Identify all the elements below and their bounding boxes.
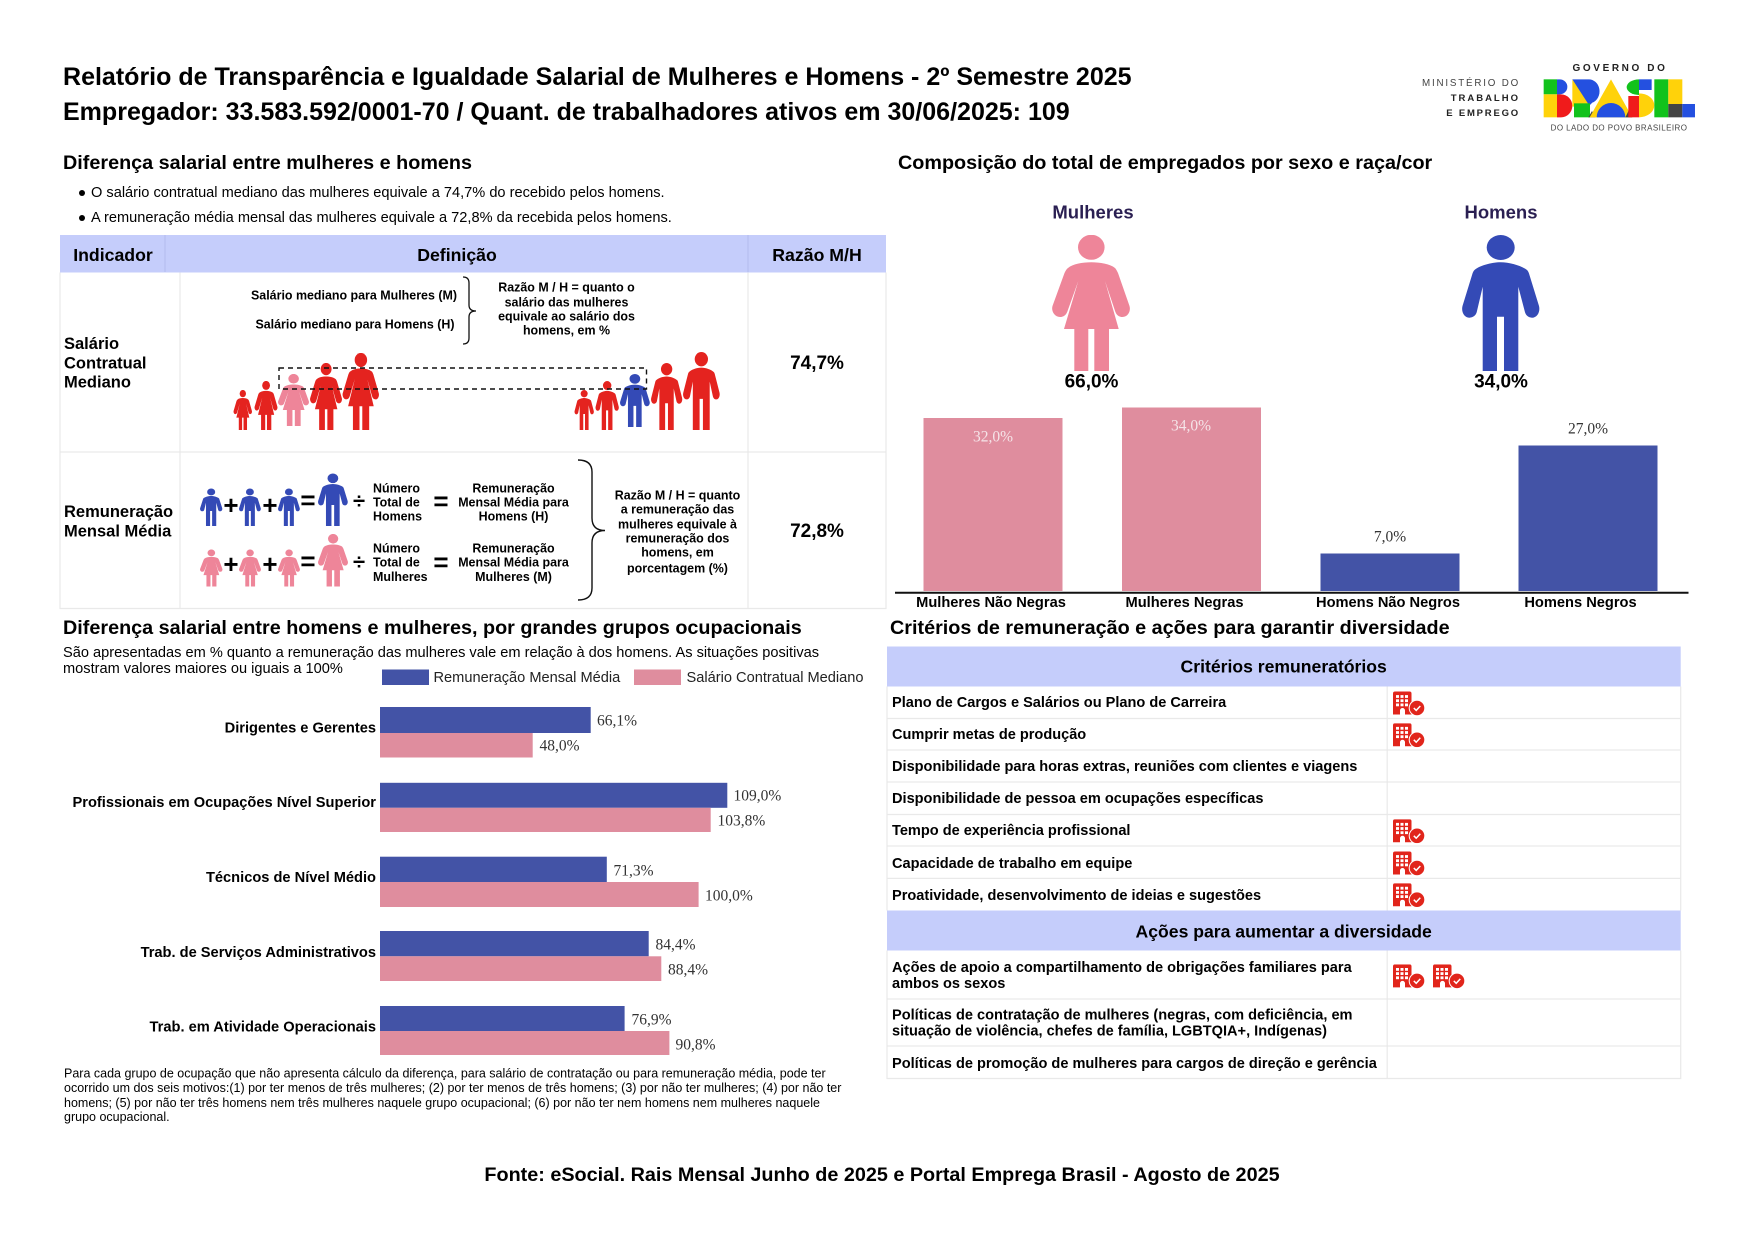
group: atividade operacionais: 76,9% bbox=[632, 1012, 672, 1028]
definition: fórmula mulheres: = bbox=[300, 546, 316, 576]
heading: critérios: Critérios de remuneração e ações para garantir diversidade bbox=[890, 617, 1450, 639]
definition: fórmula mulheres: ÷ bbox=[353, 550, 365, 574]
definition: fórmula mulheres: Mulheres (M) bbox=[475, 570, 552, 584]
indicator: remuneração mensal média: Mensal Média bbox=[64, 522, 172, 540]
definition: fórmula mulheres: Total de bbox=[373, 556, 420, 570]
criteria list: Proatividade, desenvolvimento de ideias e sugestões bbox=[892, 888, 1261, 904]
definition: fórmula mulheres: + bbox=[223, 549, 239, 579]
text block: resumo: A remuneração média mensal das mulheres equivale a 72,8% da recebida pelos homens. bbox=[91, 210, 672, 226]
indicator: salário contratual mediano: Contratual bbox=[64, 354, 146, 372]
footnote: homens; (5) por não ter três homens nem três mulheres naquele grupo ocupacional; (6) por não ter nem homens nem mulheres naquele bbox=[64, 1096, 820, 1110]
definition: fórmula homens: = bbox=[433, 486, 449, 516]
bar chart: composição por raça/cor: 27,0% bbox=[1568, 420, 1608, 438]
icons: critérios adotados bbox=[1393, 692, 1425, 908]
panel: tabela de indicadores bbox=[60, 235, 886, 608]
group: atividade operacionais bbox=[150, 1006, 716, 1055]
definition: salário mediano: Salário mediano para Mulheres (M) bbox=[251, 288, 457, 302]
panel: critérios e ações bbox=[887, 646, 1681, 1078]
criteria list: Disponibilidade de pessoa em ocupações específicas bbox=[892, 791, 1263, 807]
logo: ministério e governo: MINISTÉRIO DO bbox=[1422, 78, 1520, 89]
definition: salário mediano: Salário mediano para Homens (H) bbox=[255, 318, 455, 332]
group: profissionais nível superior bbox=[72, 783, 781, 832]
definition: fórmula homens: = bbox=[300, 485, 316, 515]
group: profissionais nível superior: 103,8% bbox=[718, 812, 765, 830]
logo: ministério e governo: E EMPREGO bbox=[1446, 108, 1520, 119]
definition: fórmula mulheres: Mulheres bbox=[373, 570, 428, 584]
group: profissionais nível superior: Profissionais em Ocupações Nível Superior bbox=[72, 795, 376, 811]
indicator: remuneração mensal média: Remuneração bbox=[64, 503, 173, 521]
actions list: Políticas de contratação de mulheres (negras, com deficiência, em bbox=[892, 1008, 1353, 1024]
panel: mulheres: Mulheres bbox=[1052, 202, 1134, 222]
group: dirigentes e gerentes: 66,1% bbox=[597, 712, 637, 730]
footnote: grupo ocupacional. bbox=[64, 1110, 170, 1124]
legend bbox=[382, 670, 864, 686]
group: serviços administrativos bbox=[141, 931, 708, 981]
panel: mulheres: 66,0% bbox=[1065, 372, 1119, 392]
heading: diferença por grupos ocupacionais: Diferença salarial entre homens e mulheres, por grandes grupos ocupacionais bbox=[63, 617, 802, 639]
pictogram: mulheres e homens ordenados bbox=[234, 352, 720, 430]
actions list: ambos os sexos bbox=[892, 976, 1005, 992]
logo: ministério e governo: GOVERNO DO bbox=[1573, 63, 1667, 74]
panel: homens: 34,0% bbox=[1474, 372, 1528, 392]
text block: resumo: O salário contratual mediano das mulheres equivale a 74,7% do recebido pelos homens. bbox=[91, 185, 665, 201]
group: serviços administrativos: Trab. de Serviços Administrativos bbox=[141, 945, 376, 961]
logo: ministério e governo: TRABALHO bbox=[1451, 93, 1520, 104]
definition: fórmula mulheres: + bbox=[262, 549, 278, 579]
definition: fórmula homens: Mensal Média para bbox=[458, 496, 569, 510]
indicator: salário contratual mediano bbox=[64, 335, 146, 392]
source: Fonte: eSocial. Rais Mensal Junho de 2025 e Portal Emprega Brasil - Agosto de 2025 bbox=[484, 1164, 1280, 1186]
definition: razão remuneração: a remuneração das bbox=[621, 502, 734, 516]
criteria list: Disponibilidade para horas extras, reuniões com clientes e viagens bbox=[892, 759, 1357, 775]
indicator: remuneração mensal média bbox=[64, 503, 173, 540]
bar chart: composição por raça/cor: 7,0% bbox=[1374, 528, 1406, 546]
table header: Definição bbox=[417, 245, 497, 265]
definition: razão remuneração bbox=[578, 460, 741, 600]
group: serviços administrativos: 84,4% bbox=[656, 936, 696, 954]
definition: fórmula mulheres: Mensal Média para bbox=[458, 556, 569, 570]
criteria list: Tempo de experiência profissional bbox=[892, 823, 1130, 839]
criteria list: Cumprir metas de produção bbox=[892, 727, 1086, 743]
bar chart: composição por raça/cor: Homens Não Negros bbox=[1316, 595, 1460, 611]
header: critérios remuneratórios: Critérios remuneratórios bbox=[1181, 656, 1387, 676]
definition: salário mediano: homens, em % bbox=[523, 324, 610, 338]
group: técnicos de nível médio: 100,0% bbox=[705, 888, 753, 904]
definition: fórmula mulheres: = bbox=[433, 547, 449, 577]
panel: homens: Homens bbox=[1464, 202, 1538, 222]
bar chart: grupos ocupacionais bbox=[72, 707, 781, 1055]
bar chart: composição por raça/cor: Mulheres Não Negras bbox=[916, 595, 1066, 611]
criteria list bbox=[892, 695, 1357, 904]
actions list: Ações de apoio a compartilhamento de obrigações familiares para bbox=[892, 960, 1353, 976]
icons: ações adotadas bbox=[1393, 964, 1465, 989]
legend: Remuneração Mensal Média bbox=[434, 670, 621, 686]
definition: fórmula homens: Homens bbox=[373, 510, 422, 524]
definition: razão remuneração: homens, em bbox=[641, 546, 714, 560]
value: razão remuneração: 72,8% bbox=[790, 521, 844, 542]
footnote bbox=[64, 1066, 841, 1124]
actions list bbox=[892, 960, 1378, 1072]
definition: fórmula homens: ÷ bbox=[353, 488, 365, 514]
bar chart: composição por raça/cor: 34,0% bbox=[1171, 418, 1211, 434]
group: serviços administrativos: 88,4% bbox=[668, 962, 708, 978]
definition: fórmula homens: + bbox=[262, 490, 278, 520]
definition: fórmula mulheres: Remuneração bbox=[472, 542, 555, 556]
text block: resumo bbox=[79, 185, 672, 226]
bar chart: composição por raça/cor: Mulheres Negras bbox=[1126, 595, 1243, 611]
definition: fórmula homens: + bbox=[223, 490, 239, 520]
text block: explicação: São apresentadas em % quanto a remuneração das mulheres vale em relação à dos homens. As situações positivas bbox=[63, 645, 819, 661]
definition: razão remuneração: remuneração dos bbox=[626, 532, 729, 546]
definition: salário mediano: equivale ao salário dos bbox=[498, 310, 635, 324]
title: Relatório de Transparência e Igualdade Salarial de Mulheres e Homens - 2º Semestre 2025 bbox=[63, 63, 1132, 91]
definition: fórmula homens bbox=[200, 474, 569, 526]
definition: salário mediano: salário das mulheres bbox=[505, 296, 628, 310]
definition: fórmula homens: Remuneração bbox=[472, 482, 555, 496]
legend: Salário Contratual Mediano bbox=[686, 670, 864, 686]
text block: explicação bbox=[63, 645, 819, 677]
panel: homens bbox=[1462, 202, 1539, 392]
indicator: salário contratual mediano: Mediano bbox=[64, 374, 131, 392]
panel: mulheres bbox=[1052, 202, 1134, 392]
definition: razão remuneração: mulheres equivale à bbox=[618, 518, 737, 532]
group: técnicos de nível médio bbox=[206, 857, 753, 907]
logo: ministério e governo bbox=[1422, 63, 1695, 132]
group: dirigentes e gerentes bbox=[225, 707, 637, 758]
footnote: ocorrido um dos seis motivos:(1) por ter menos de três mulheres; (2) por ter menos de três homens; (3) por não ter mulheres; (4) por não ter bbox=[64, 1081, 841, 1095]
definition: razão remuneração: porcentagem (%) bbox=[627, 562, 728, 576]
definition: fórmula homens: Número bbox=[373, 482, 420, 496]
bar chart: composição por raça/cor: Homens Negros bbox=[1524, 595, 1637, 611]
group: dirigentes e gerentes: 48,0% bbox=[540, 738, 580, 754]
definition: fórmula mulheres bbox=[200, 534, 569, 586]
table header bbox=[73, 245, 862, 265]
group: técnicos de nível médio: 71,3% bbox=[614, 862, 654, 880]
definition: salário mediano bbox=[251, 277, 635, 344]
title bbox=[63, 63, 1132, 126]
actions list: Políticas de promoção de mulheres para cargos de direção e gerência bbox=[892, 1056, 1378, 1072]
logo: ministério e governo: DO LADO DO POVO BRASILEIRO bbox=[1551, 124, 1687, 132]
criteria list: Plano de Cargos e Salários ou Plano de Carreira bbox=[892, 695, 1227, 711]
definition: fórmula homens: Homens (H) bbox=[479, 510, 548, 524]
group: dirigentes e gerentes: Dirigentes e Gerentes bbox=[225, 720, 376, 736]
group: profissionais nível superior: 109,0% bbox=[734, 788, 781, 804]
heading: composição: Composição do total de empregados por sexo e raça/cor bbox=[898, 152, 1433, 174]
footnote: Para cada grupo de ocupação que não apresenta cálculo da diferença, para salário de contratação ou para remuneração média, pode ter bbox=[64, 1066, 826, 1080]
definition: fórmula mulheres: Número bbox=[373, 542, 420, 556]
group: atividade operacionais: Trab. em Atividade Operacionais bbox=[150, 1020, 376, 1036]
criteria list: Capacidade de trabalho em equipe bbox=[892, 856, 1132, 872]
table header: Indicador bbox=[73, 245, 153, 265]
group: atividade operacionais: 90,8% bbox=[676, 1036, 716, 1054]
bar chart: composição por raça/cor: 32,0% bbox=[973, 428, 1013, 446]
value: razão salário contratual: 74,7% bbox=[790, 353, 844, 374]
text block: explicação: mostram valores maiores ou iguais a 100% bbox=[63, 661, 343, 677]
header: ações: Ações para aumentar a diversidade bbox=[1136, 922, 1432, 942]
table header: Razão M/H bbox=[772, 245, 862, 265]
definition: razão remuneração: Razão M / H = quanto bbox=[615, 488, 741, 502]
bar chart: composição por raça/cor bbox=[895, 408, 1688, 611]
indicator: salário contratual mediano: Salário bbox=[64, 335, 119, 353]
heading: diferença salarial: Diferença salarial entre mulheres e homens bbox=[63, 152, 472, 174]
definition: fórmula homens: Total de bbox=[373, 496, 420, 510]
group: técnicos de nível médio: Técnicos de Nível Médio bbox=[206, 870, 376, 886]
definition: salário mediano: Razão M / H = quanto o bbox=[498, 280, 635, 294]
actions list: situação de violência, chefes de família, LGBTQIA+, Indígenas) bbox=[892, 1024, 1327, 1040]
title: Empregador: 33.583.592/0001-70 / Quant. de trabalhadores ativos em 30/06/2025: 109 bbox=[63, 98, 1070, 126]
